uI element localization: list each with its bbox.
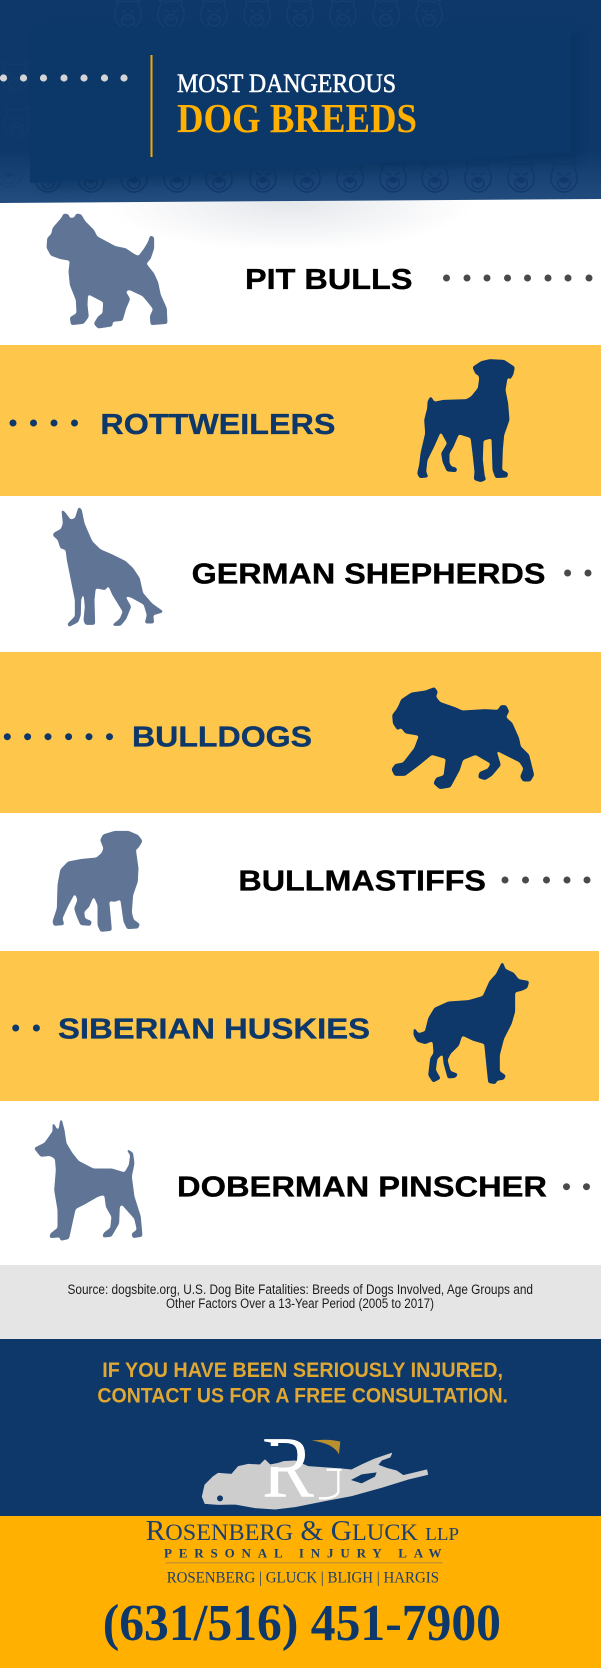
dots [10, 420, 78, 426]
label: bulldogs: BULLDOGS [132, 722, 312, 754]
panel: german shepherds [0, 496, 601, 652]
dots [4, 733, 113, 740]
partners: ROSENBERG | GLUCK | BLIGH | HARGIS [167, 1569, 439, 1586]
firm name: ROSENBERG & GLUCK LLP [146, 1516, 459, 1547]
dots [12, 1024, 40, 1032]
label: pit bulls: PIT BULLS [245, 264, 412, 296]
panel: call to action [0, 1339, 601, 1517]
dots [502, 876, 590, 884]
dots [563, 1183, 590, 1190]
panel: siberian huskies [0, 951, 599, 1101]
panel: doberman pinscher [0, 1101, 601, 1265]
icon: rottweiler [418, 360, 514, 481]
icon: german shepherd [54, 508, 162, 626]
logo: long island with monogram: R [262, 1420, 314, 1517]
title [177, 69, 417, 141]
icon: siberian husky [414, 963, 528, 1083]
icon: pit bull [47, 214, 167, 328]
title: DOG BREEDS [177, 95, 417, 141]
source text [68, 1282, 533, 1311]
label: rottweilers: ROTTWEILERS [100, 409, 335, 441]
label: bullmastiffs: BULLMASTIFFS [238, 866, 486, 898]
tagline: PERSONAL INJURY LAW [164, 1546, 442, 1561]
label: german shepherds: GERMAN SHEPHERDS [192, 558, 545, 590]
icon: bulldog [392, 688, 533, 788]
source text: Source: dogsbite.org, U.S. Dog Bite Fatalities: Breeds of Dogs Involved, Age Groups and [68, 1282, 533, 1297]
panel: source [0, 1265, 601, 1339]
dots [443, 274, 592, 282]
title panel [0, 27, 571, 183]
source text: Other Factors Over a 13-Year Period (2005 to 2017) [166, 1296, 434, 1311]
panel: bulldogs [0, 652, 601, 813]
cta text: IF YOU HAVE BEEN SERIOUSLY INJURED, [102, 1358, 503, 1382]
header dots [0, 74, 128, 82]
cta text [97, 1358, 508, 1408]
label: siberian huskies: SIBERIAN HUSKIES [58, 1013, 370, 1045]
cta text: CONTACT US FOR A FREE CONSULTATION. [97, 1384, 508, 1408]
icon: doberman [35, 1120, 142, 1240]
logo: long island with monogram [202, 1439, 428, 1510]
header divider [150, 55, 152, 157]
panel: bullmastiffs [0, 813, 601, 951]
panel: firm contact [0, 1516, 601, 1668]
panel: pit bulls [0, 155, 601, 345]
panel: rottweilers [0, 345, 601, 496]
tagline rule [166, 1562, 443, 1564]
dots [564, 570, 592, 576]
icon: bullmastiff [53, 832, 142, 931]
phone number: (631/516) 451-7900 [103, 1595, 501, 1652]
label: doberman pinscher: DOBERMAN PINSCHER [177, 1172, 547, 1204]
title: MOST DANGEROUS [177, 69, 396, 98]
header band [0, 0, 601, 203]
